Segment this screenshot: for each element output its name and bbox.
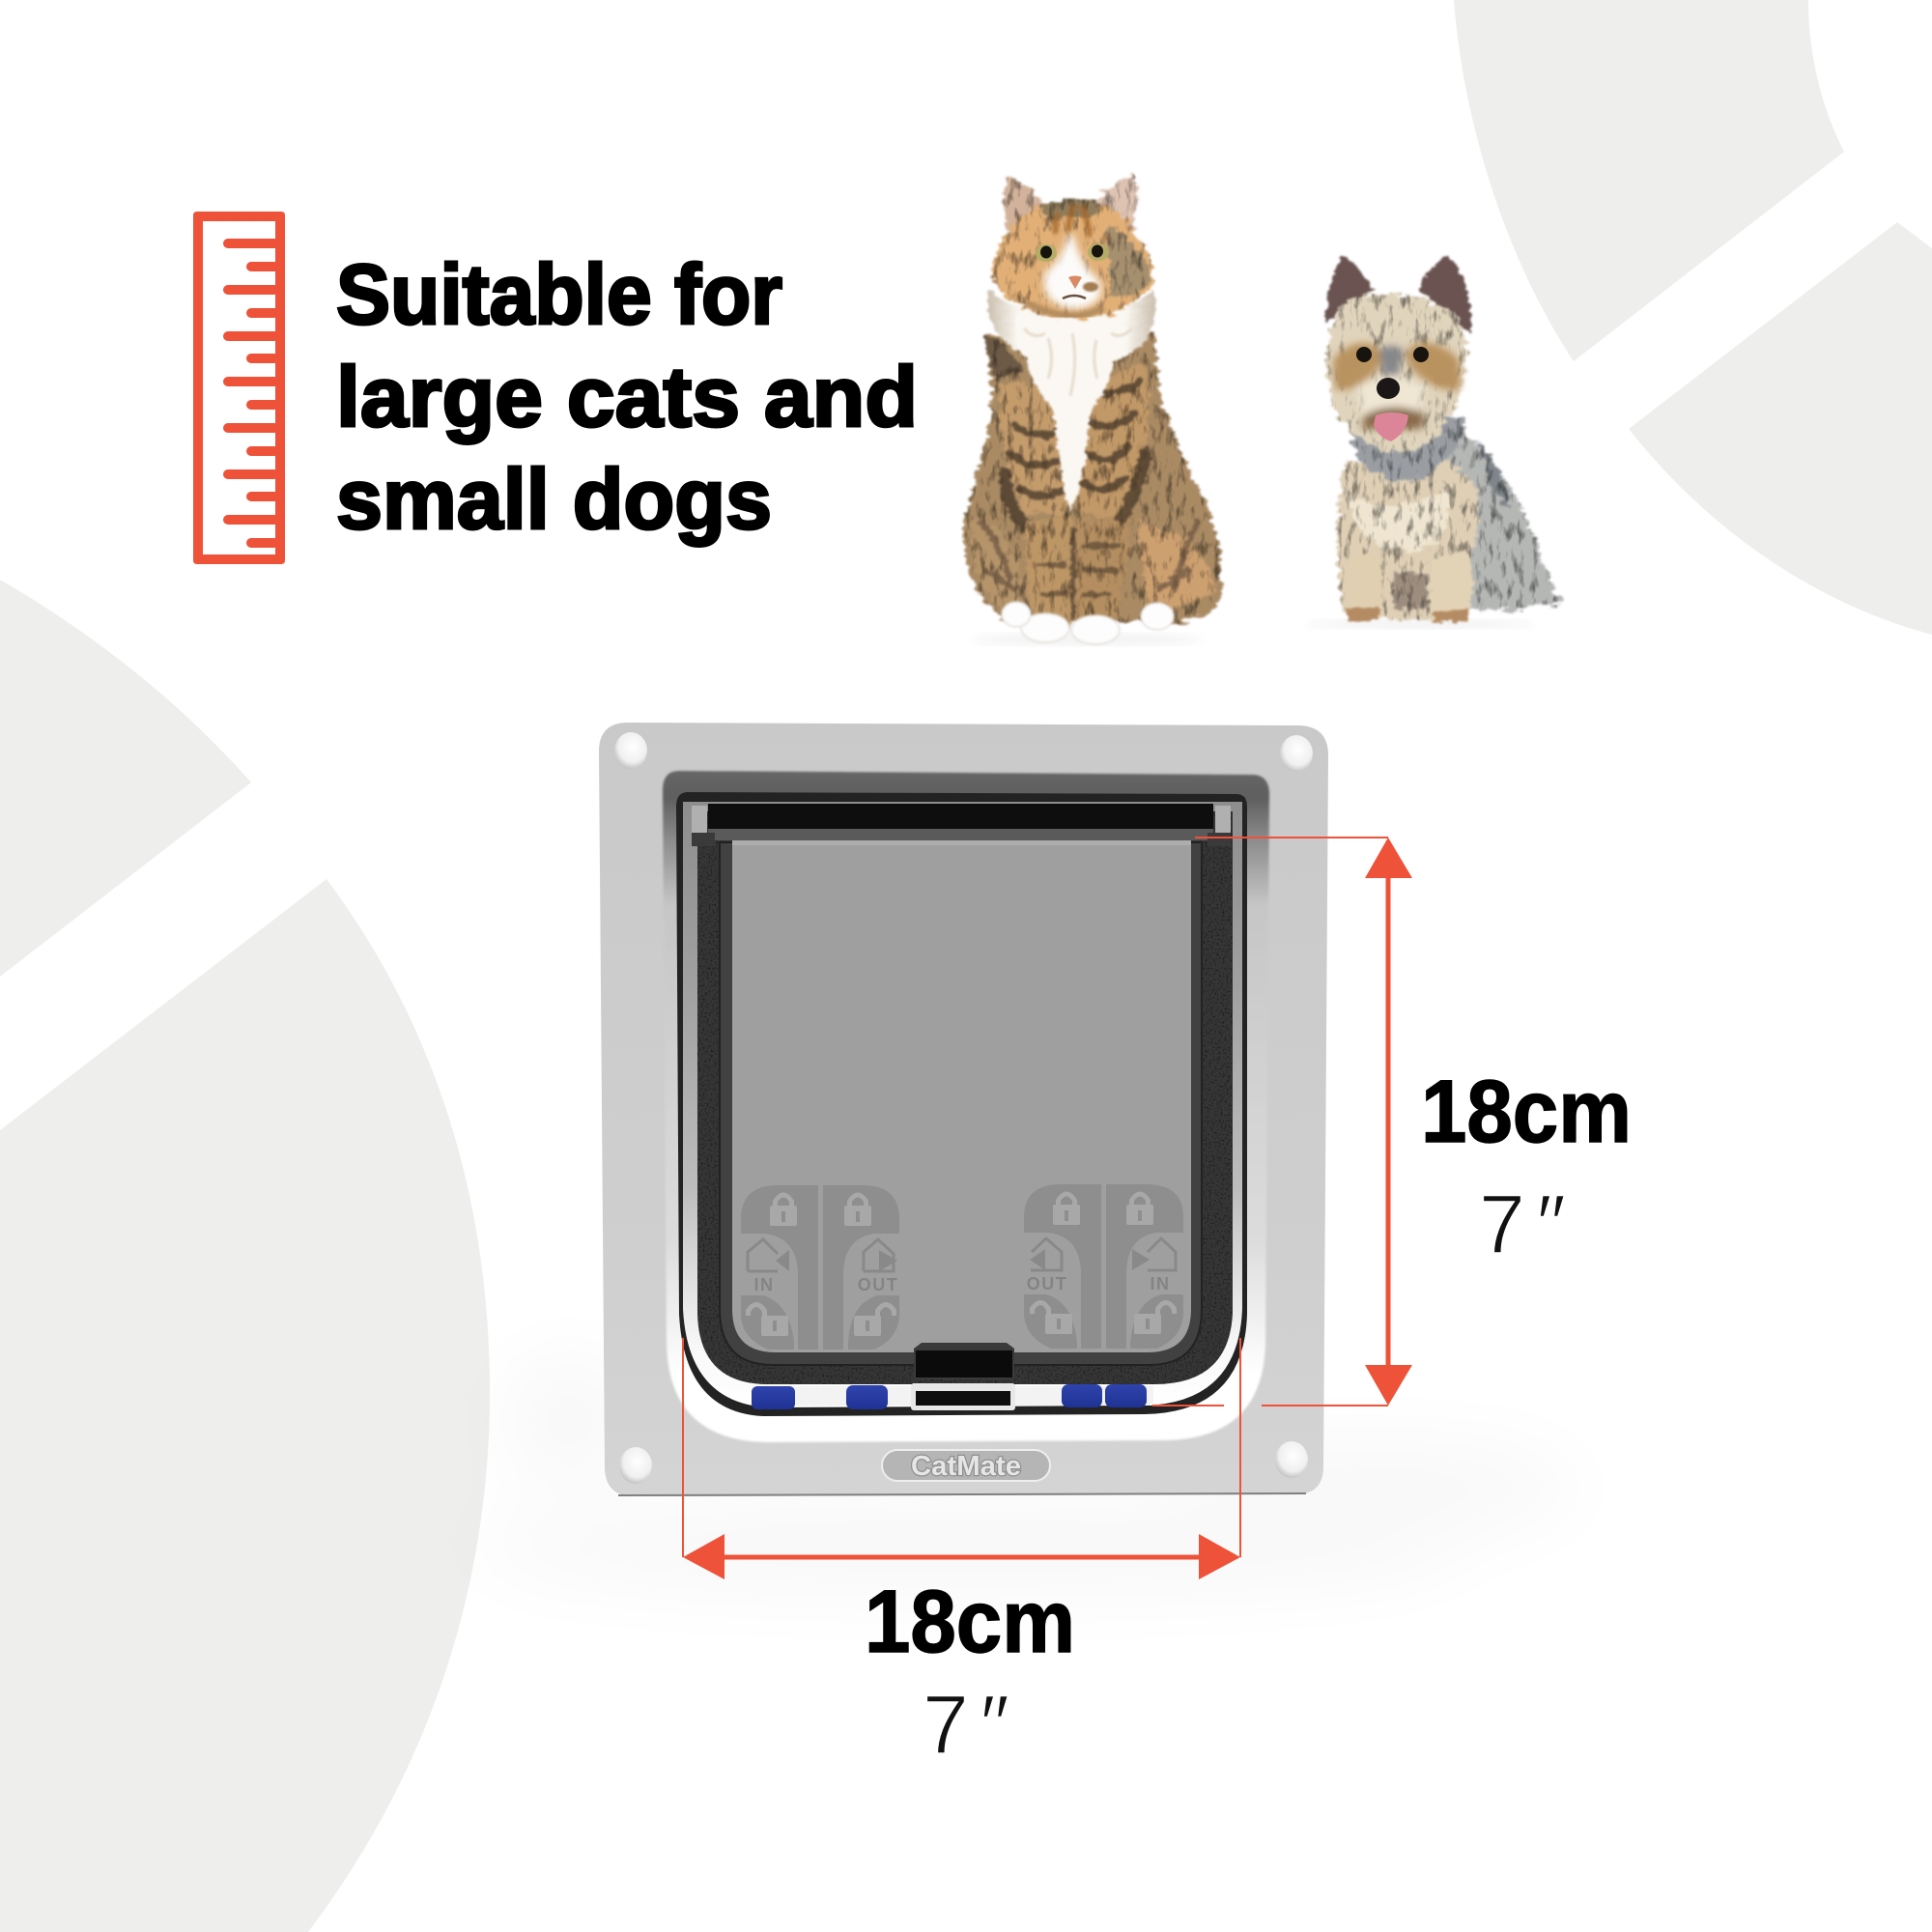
cat head — [991, 199, 1153, 319]
logo badge: CatMate — [911, 1451, 1021, 1482]
brush strip — [697, 811, 1233, 1384]
icon: ruler — [193, 212, 285, 564]
dog muzzle shading — [1333, 343, 1461, 429]
recess bevel — [663, 771, 1269, 1442]
photo: pet door — [599, 723, 1328, 1496]
flap lock graphic 1 — [741, 1185, 818, 1350]
cat paws — [1002, 602, 1174, 644]
heading: large cats and — [336, 349, 918, 444]
flap labels: OUT — [858, 1275, 898, 1294]
heading: small dogs — [336, 451, 772, 547]
dark outline — [676, 792, 1247, 1416]
dog ears — [1325, 256, 1471, 333]
flap labels: OUT — [1027, 1274, 1067, 1293]
cat white chest — [988, 290, 1155, 512]
label: height value — [1421, 1063, 1632, 1271]
dog head — [1326, 294, 1466, 452]
flap — [732, 842, 1191, 1352]
centre latch — [911, 1343, 1015, 1410]
flap lock graphic 2 — [823, 1185, 899, 1350]
label: width value — [865, 1573, 1075, 1772]
flap labels: IN — [1150, 1274, 1171, 1293]
label: width value: 18cm — [865, 1573, 1075, 1671]
flap lock graphic 3 — [1024, 1184, 1101, 1349]
flap labels — [753, 1274, 1171, 1294]
photo: dog — [1304, 256, 1563, 629]
photo: cat — [963, 173, 1221, 645]
heading: Suitable for — [336, 246, 782, 342]
cat stripes — [980, 382, 1198, 589]
cat forelegs — [1025, 517, 1129, 628]
dog grey neck — [1350, 415, 1466, 481]
dog body — [1337, 430, 1563, 620]
dog legs — [1344, 551, 1473, 623]
blue tabs — [752, 1384, 1147, 1409]
dimension: width — [682, 1338, 1241, 1579]
flap frame — [720, 842, 1202, 1365]
label: height value: 18cm — [1421, 1063, 1632, 1161]
cat ears — [1004, 173, 1136, 243]
label: height value: 7″ — [1479, 1179, 1566, 1271]
cat leg stripes — [1037, 526, 1121, 618]
door plate — [599, 723, 1328, 1496]
logo badge — [882, 1450, 1050, 1482]
cat face — [1026, 205, 1109, 316]
cat chest fur folds — [1024, 328, 1132, 396]
top slot — [708, 804, 1213, 829]
label: width value: 7″ — [923, 1679, 1009, 1772]
flap labels: IN — [753, 1275, 775, 1294]
flap lock graphic 4 — [1106, 1184, 1183, 1349]
inner ring — [683, 802, 1242, 1407]
floor shadows — [464, 1352, 1584, 1599]
screws — [614, 732, 1313, 1484]
hinges — [692, 806, 1231, 833]
cat body fur — [963, 333, 1221, 623]
dimension: height — [1152, 837, 1412, 1406]
bottom white strip — [755, 1386, 1153, 1406]
heading — [336, 246, 918, 547]
dog face — [1356, 347, 1429, 441]
